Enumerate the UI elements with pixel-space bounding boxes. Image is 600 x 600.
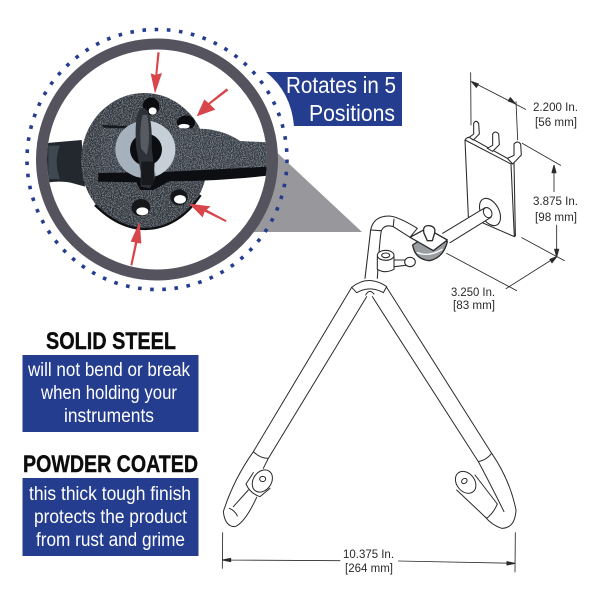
dimension label: 2.200 in: [56 mm] bbox=[535, 117, 577, 129]
dimension label: 3.875 in bbox=[533, 196, 578, 224]
white disc with grey ring bbox=[42, 44, 272, 275]
dimension lines bbox=[447, 73, 564, 291]
label: rotates in 5 positions bbox=[266, 72, 402, 126]
hinge disc bbox=[413, 233, 447, 261]
panel: solid steel description: instruments bbox=[64, 406, 154, 427]
dotted outer ring bbox=[27, 30, 287, 290]
dimension label: 3.250 in: 3.250 In. bbox=[451, 287, 495, 299]
line drawing: forked arms bbox=[222, 280, 516, 572]
photo: rotating hinge plate with holes bbox=[43, 52, 268, 266]
heading: powder coated: POWDER COATED bbox=[23, 451, 198, 478]
panel: solid steel description: will not bend or break bbox=[27, 360, 190, 381]
dimension label: 10.375 in: [264 mm] bbox=[345, 563, 393, 575]
dimension label: 3.875 in: [98 mm] bbox=[535, 212, 577, 224]
dimension label: 10.375 in: 10.375 In. bbox=[343, 549, 394, 561]
red arrows bbox=[130, 52, 228, 266]
right arm bbox=[372, 287, 516, 528]
panel: solid steel description: when holding your bbox=[40, 383, 178, 404]
grey pointer wedge bbox=[245, 146, 362, 232]
left end cylinder bbox=[229, 473, 270, 516]
label: rotates in 5 positions: Rotates in 5 bbox=[286, 72, 396, 98]
panel: powder coated description: this thick tough finish bbox=[29, 484, 191, 505]
panel: solid steel description bbox=[22, 355, 198, 432]
line drawing: wall mount bracket with dimensions bbox=[365, 73, 564, 291]
disc bbox=[81, 93, 208, 229]
loop bolt bbox=[136, 108, 155, 188]
dimension label: 2.200 in bbox=[533, 102, 578, 129]
dimension label: 3.250 in bbox=[451, 287, 495, 312]
dimension label: 10.375 in bbox=[343, 549, 394, 575]
label: rotates in 5 positions: Positions bbox=[309, 100, 395, 126]
flange and tube bbox=[475, 195, 505, 229]
panel: powder coated description bbox=[22, 478, 198, 556]
photo circle callout bbox=[27, 30, 287, 290]
yoke top bbox=[352, 280, 387, 295]
dimension label: 3.875 in: 3.875 In. bbox=[533, 196, 578, 208]
left arm bbox=[43, 140, 85, 187]
heading: solid steel: SOLID STEEL bbox=[46, 328, 176, 355]
plate bbox=[465, 137, 516, 237]
width dimension bbox=[222, 533, 515, 572]
panel: powder coated description: from rust and grime bbox=[36, 530, 185, 551]
clamp bbox=[377, 257, 394, 272]
right end cylinder bbox=[457, 475, 497, 518]
bent tube bbox=[365, 216, 417, 278]
washer bbox=[115, 121, 175, 178]
left arm bbox=[223, 287, 367, 527]
dimension label: 2.200 in: 2.200 In. bbox=[533, 102, 578, 114]
holes bbox=[143, 97, 159, 115]
plate and right arm bbox=[98, 126, 268, 178]
hooks bbox=[469, 121, 479, 140]
dimension label: 3.250 in: [83 mm] bbox=[453, 300, 495, 312]
panel: powder coated description: protects the product bbox=[34, 507, 188, 528]
